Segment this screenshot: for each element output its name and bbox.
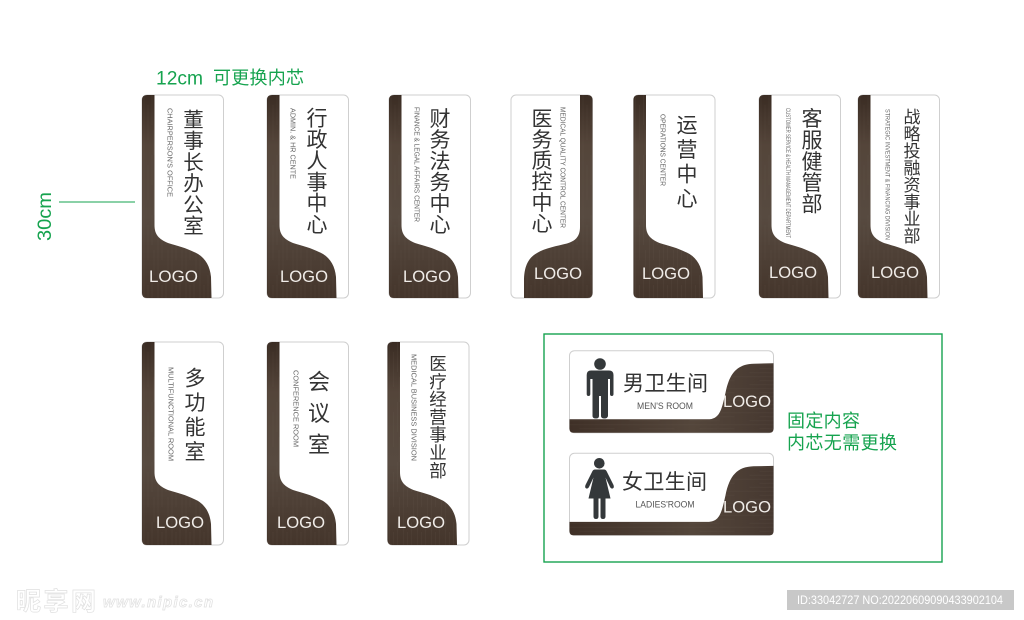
sign: 运营中心: LOGO — [642, 264, 690, 283]
sign: 战略投融资事业部: LOGO — [871, 263, 919, 282]
sign: 行政人事中心 — [267, 95, 348, 298]
sign: 会议室: 会议室 — [308, 370, 330, 458]
watermark: site logo — [16, 588, 213, 616]
sign: ladies' room: 女卫生间 — [622, 471, 707, 494]
note: fixed content, no insert change: 内芯无需更换 — [787, 433, 897, 453]
panel: fixed-content restroom signs frame — [544, 334, 942, 562]
sign: 运营中心: OPERATIONS CENTER — [658, 114, 667, 187]
sign: men's room — [570, 351, 774, 433]
sign: 财务法务中心: LOGO — [403, 267, 451, 286]
sign: 战略投融资事业部: 战略投融资事业部 — [904, 108, 920, 246]
sign: 多功能室: 多功能室 — [184, 368, 206, 464]
sign: ladies' room — [570, 453, 774, 535]
sign: 行政人事中心: ADMIN. & HR CENTE — [288, 108, 297, 179]
note: fixed content, no insert change: 固定内容 — [787, 411, 860, 431]
sign: 医疗经营事业部 — [388, 342, 469, 545]
sign: 多功能室 — [142, 342, 224, 545]
sign: 董事长办公室 — [142, 95, 224, 298]
sign: 医疗经营事业部: LOGO — [397, 513, 445, 532]
sign: ladies' room: LADIES'ROOM — [636, 499, 694, 509]
sign: 会议室: CONFERENCE ROOM — [291, 370, 300, 447]
watermark: site logo: www.nipic.cn — [103, 594, 213, 611]
sign: 客服健管部: LOGO — [769, 263, 817, 282]
watermark: site logo: 昵享网 — [16, 588, 96, 616]
image id bar — [787, 590, 1014, 610]
height annotation: 30cm with leader line: 30cm — [35, 192, 56, 241]
sign: 会议室 — [267, 342, 348, 545]
sign: men's room: MEN'S ROOM — [637, 401, 693, 411]
sign: 医务质控中心 (mirrored) — [511, 95, 592, 298]
sign: ladies' room: LOGO — [723, 497, 771, 516]
sign: 运营中心: 运营中心 — [676, 114, 698, 211]
sign: 财务法务中心: FINANCE & LEGAL AFFAIRS CENTER — [412, 107, 421, 223]
icon: woman — [585, 458, 614, 519]
sign: 多功能室: LOGO — [156, 513, 204, 532]
sign: 运营中心 — [634, 95, 715, 298]
note: fixed content, no insert change — [787, 411, 897, 453]
icon: man — [587, 358, 614, 418]
sign: 董事长办公室: CHAIRPERSON'S OFFICE — [165, 108, 174, 197]
sign: 医务质控中心 (mirrored): LOGO — [534, 264, 582, 283]
sign: 会议室: LOGO — [277, 513, 325, 532]
sign: 客服健管部: 客服健管部 — [802, 108, 822, 217]
sign: 董事长办公室: 董事长办公室 — [183, 109, 204, 238]
sign: 战略投融资事业部 — [858, 95, 940, 298]
sign: 财务法务中心 — [389, 95, 470, 298]
height annotation: 30cm with leader line — [35, 192, 135, 241]
sign: 多功能室: MULTIFUNCTIONAL ROOM — [166, 367, 175, 461]
sign: 医务质控中心 (mirrored): MEDICAL QUALITY CONTROL CENTER — [558, 107, 567, 229]
image id bar: ID:33042727 NO:20220609090433902104 — [797, 593, 1003, 607]
width annotation: 12cm replaceable insert: 可更换内芯 — [213, 68, 304, 88]
sign: men's room: 男卫生间 — [623, 373, 708, 396]
sign: 战略投融资事业部: STRATEGIC INVESTMENT & FINANCING DIVISION — [884, 109, 891, 240]
sign: 医疗经营事业部: 医疗经营事业部 — [429, 354, 447, 481]
width annotation: 12cm replaceable insert — [156, 68, 304, 90]
sign: 医务质控中心 (mirrored): 医务质控中心 — [532, 108, 552, 236]
sign: 行政人事中心: 行政人事中心 — [306, 108, 328, 237]
sign: 董事长办公室: LOGO — [149, 267, 198, 286]
width annotation: 12cm replaceable insert: 12cm — [156, 68, 203, 90]
sign: 财务法务中心: 财务法务中心 — [430, 108, 450, 237]
sign: 医疗经营事业部: MEDICAL BUSINESS DIVISION — [409, 354, 418, 461]
sign: 客服健管部: CUSTOMER SERVICE & HEALTH MANAGEMENT DEPARTMENT — [784, 108, 790, 238]
sign: 行政人事中心: LOGO — [280, 267, 328, 286]
sign: 客服健管部 — [759, 95, 840, 298]
sign: men's room: LOGO — [723, 392, 771, 411]
